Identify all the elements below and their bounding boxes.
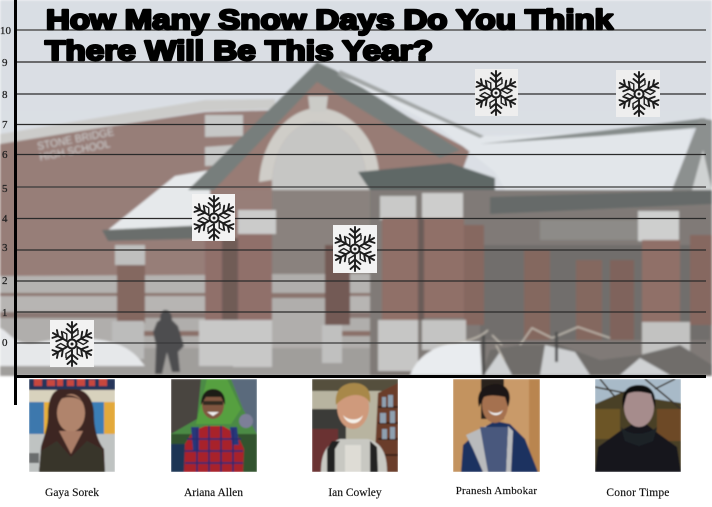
background photo: school building in snow <box>0 0 712 376</box>
snowflake: Gaya Sorek, 0 days <box>50 320 94 367</box>
central gable <box>190 68 470 190</box>
pedestrian <box>153 310 184 374</box>
right covered entry <box>370 190 712 376</box>
photo: Ian Cowley <box>312 379 398 472</box>
snow-covered right roof <box>336 74 692 198</box>
title <box>45 4 613 66</box>
snowflake: Pranesh Ambokar, 8 days <box>474 69 518 116</box>
y axis labels: 9 <box>2 57 8 69</box>
y axis labels <box>0 25 12 349</box>
chart gridlines <box>17 30 706 343</box>
name: Pranesh Ambokar: Pranesh Ambokar <box>456 485 537 497</box>
snow piles <box>0 328 145 366</box>
y axis labels: 10 <box>0 25 12 37</box>
left wing brick wall <box>0 99 460 376</box>
y axis labels: 6 <box>2 149 8 161</box>
y axis labels: 2 <box>2 275 8 287</box>
y axis labels: 1 <box>2 307 8 319</box>
y axis labels: 8 <box>2 89 8 101</box>
name: Conor Timpe: Conor Timpe <box>606 487 670 499</box>
school sign: STONE BRIDGE <box>36 126 115 153</box>
name: Ariana Allen: Ariana Allen <box>184 487 243 499</box>
name: Ian Cowley: Ian Cowley <box>328 487 382 499</box>
y axis labels: 3 <box>2 242 8 254</box>
snowflake: Conor Timpe, 8 days <box>616 70 661 117</box>
chart axes <box>14 0 706 405</box>
snowflake: Ariana Allen, 4 days <box>192 194 236 241</box>
school sign <box>36 126 117 164</box>
photo: Gaya Sorek <box>29 379 115 472</box>
left porch roof <box>108 170 210 230</box>
photo: Ariana Allen <box>171 379 257 472</box>
y axis labels: 4 <box>2 213 8 225</box>
brick columns <box>112 193 712 372</box>
y axis labels: 7 <box>2 119 8 131</box>
name: Gaya Sorek: Gaya Sorek <box>45 487 99 499</box>
y axis labels: 0 <box>2 337 8 349</box>
title: There Will Be This Year? <box>45 35 433 66</box>
photo: Pranesh Ambokar <box>453 379 540 472</box>
y axis labels: 5 <box>2 183 8 195</box>
central recess <box>272 190 370 274</box>
title: How Many Snow Days Do You Think <box>46 4 613 35</box>
school sign: HIGH SCHOOL <box>38 138 111 164</box>
photo: Conor Timpe <box>595 379 681 472</box>
snowflake: Ian Cowley, 3 days <box>333 225 377 273</box>
